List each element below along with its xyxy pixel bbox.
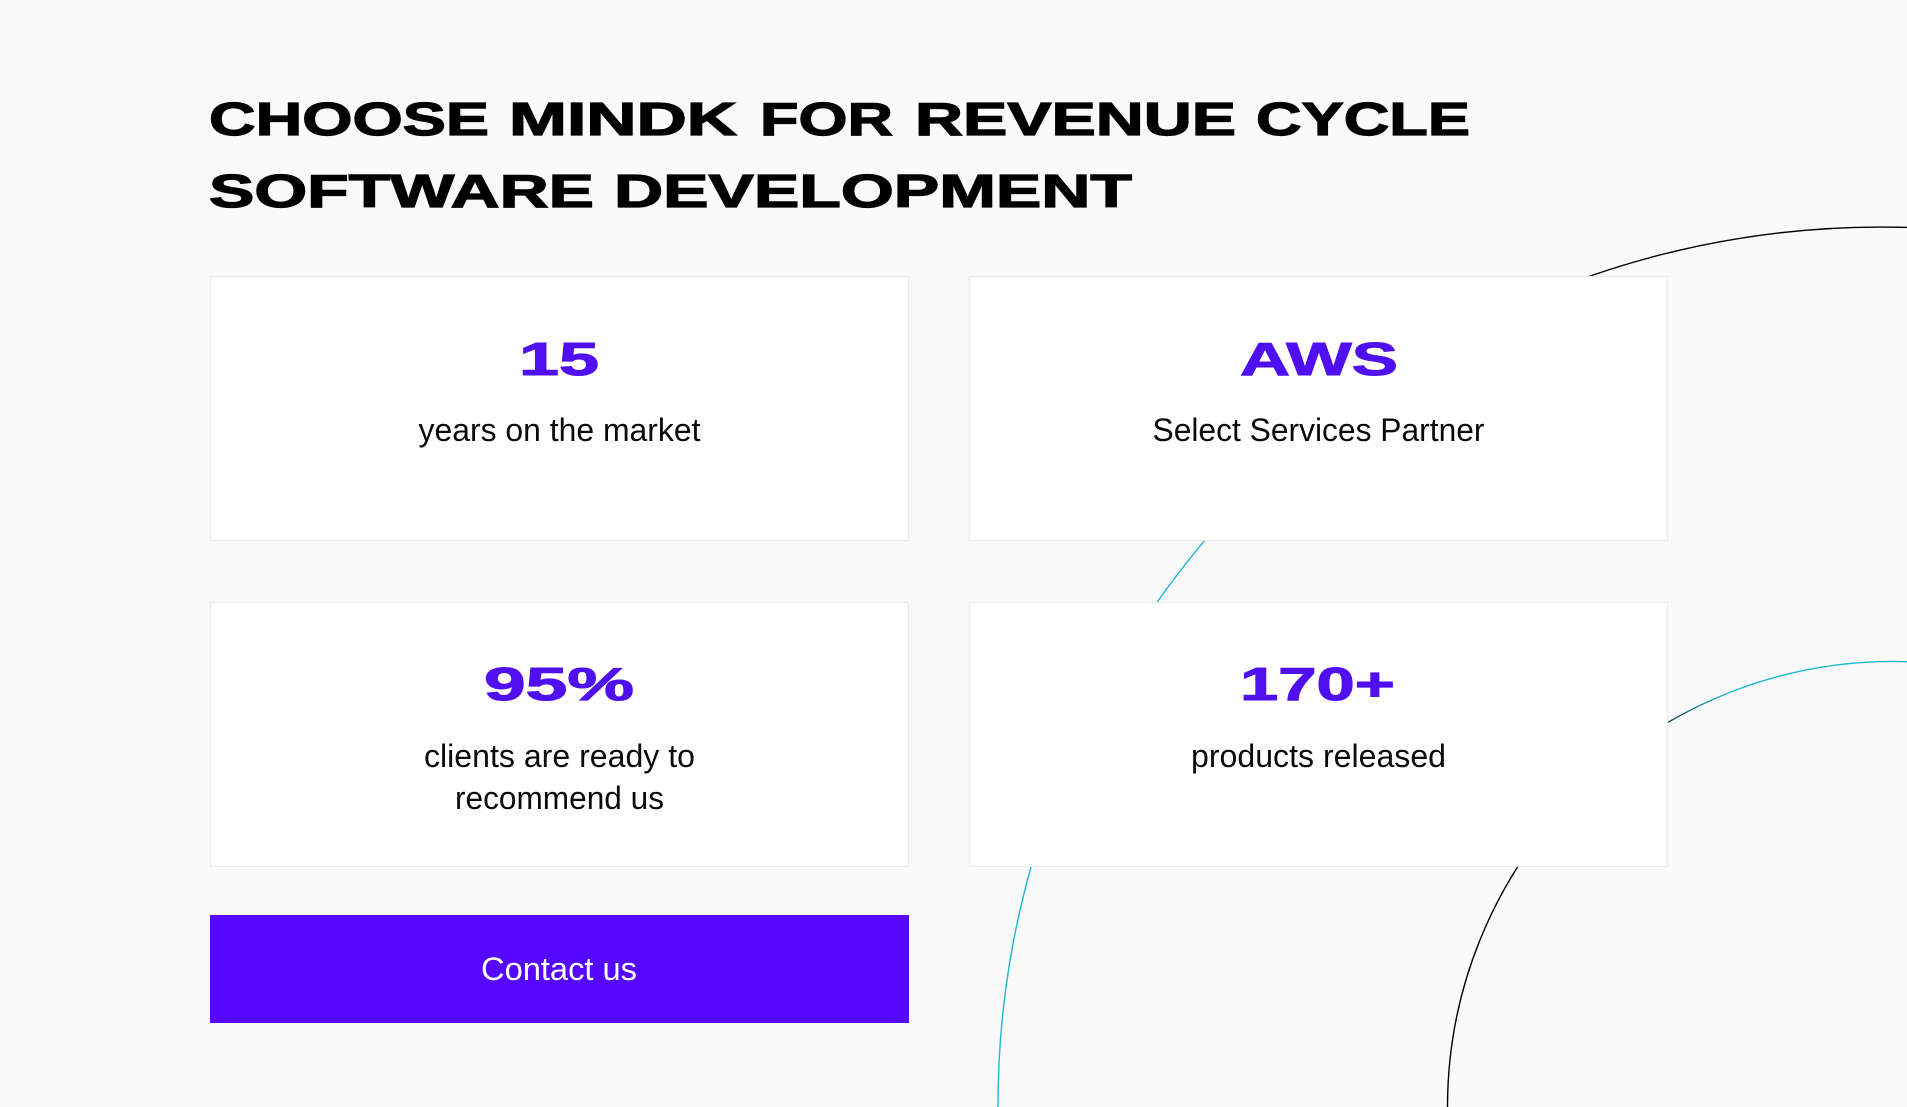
stat label: clients are ready to recommend us: recommend us <box>455 780 664 816</box>
stat: 95%: 95% <box>484 658 634 710</box>
button: Contact us: Contact us <box>481 951 637 987</box>
panel: 15 years on the market <box>210 276 908 540</box>
stat label: clients are ready to recommend us <box>424 738 695 816</box>
title: REVENUE <box>915 93 1236 145</box>
stat label: clients are ready to recommend us: clients are ready to <box>424 738 695 774</box>
stat: 15: 15 <box>519 333 599 385</box>
outer decorative arc <box>998 227 1907 1107</box>
title: SOFTWARE <box>209 165 594 217</box>
panel: 170+ products released <box>970 602 1668 866</box>
stat: 170+: 170+ <box>1240 658 1395 710</box>
panel: 95% clients ready to recommend <box>210 602 908 866</box>
title <box>209 93 1470 217</box>
title: CHOOSE <box>209 93 489 145</box>
stat label: Select Services Partner: Select Services Partner <box>1152 412 1485 448</box>
title: FOR <box>760 93 893 145</box>
inner decorative arc <box>1448 661 1907 1107</box>
title: MINDK <box>509 93 737 145</box>
title: DEVELOPMENT <box>614 165 1132 217</box>
title: CYCLE <box>1256 93 1470 145</box>
stat: AWS: AWS <box>1240 333 1398 385</box>
panel: AWS Select Services Partner <box>970 276 1668 540</box>
button: Contact us <box>210 915 909 1023</box>
stat label: years on the market: years on the market <box>418 412 701 448</box>
stat label: products released: products released <box>1191 738 1446 774</box>
